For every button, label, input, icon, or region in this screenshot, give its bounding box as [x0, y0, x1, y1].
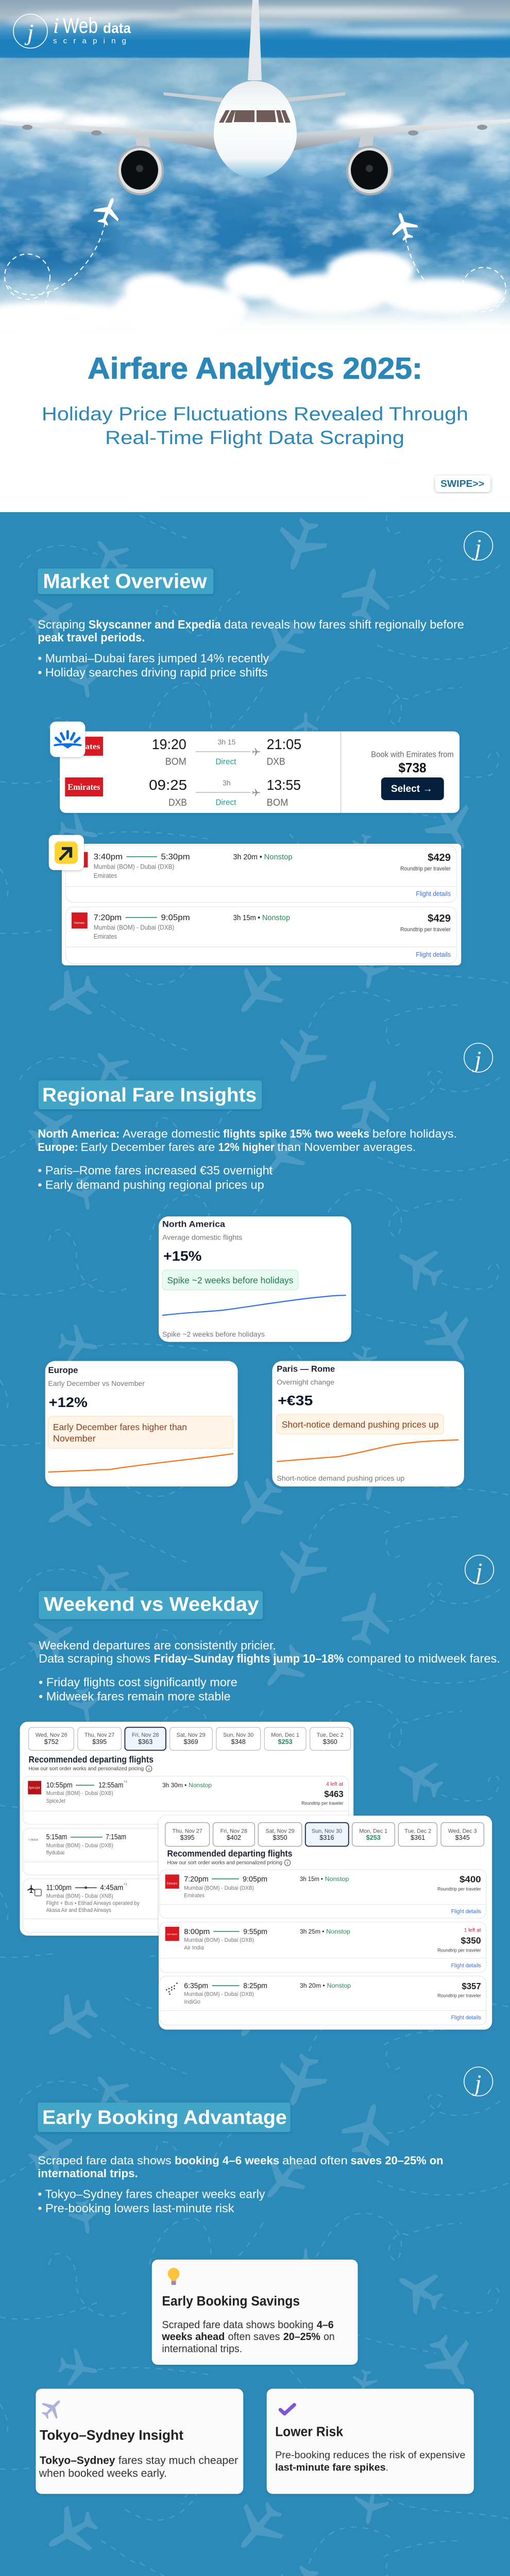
- panel: expedia flight card: Flight details: [416, 890, 451, 897]
- text block: • Holiday searches driving rapid price shifts: [38, 666, 268, 679]
- date tabs: $253: [366, 1834, 381, 1841]
- panel: skyscanner flight card: 3h: [223, 778, 231, 787]
- panel: expedia flight card: 9:05pm: [161, 913, 190, 922]
- flight row: spicejet: 12:55am: [98, 1781, 123, 1789]
- panel: lower risk card: last-minute fare spikes: [275, 2462, 386, 2473]
- panel: expedia flight card: Mumbai (BOM) - Dubai (DXB): [94, 924, 174, 931]
- flight row: indigo: Nonstop: [327, 1982, 351, 1989]
- flight row: air india: Air India: [184, 1945, 204, 1951]
- swipe button: SWIPE>>: [440, 479, 484, 489]
- logo: iWeb data scraping white: scraping: [53, 37, 126, 45]
- icon: small plane with dashed route left: [5, 193, 125, 326]
- flight row: flight plus bus: Flight + Bus • Etihad Airways operated by: [46, 1901, 140, 1907]
- flight row: indigo: [166, 1981, 481, 2021]
- panel: expedia flight card: [49, 835, 461, 965]
- panel: north america card: North America: [162, 1219, 226, 1229]
- icon: light bulb: [168, 2268, 179, 2285]
- flight row: emirates: 7:20pm: [184, 1875, 209, 1884]
- panel: paris rome card: [272, 1361, 464, 1486]
- panel: weekend vs weekday: [20, 1555, 500, 2029]
- date tabs: $395: [180, 1834, 195, 1841]
- icon: expedia: [49, 835, 84, 870]
- panel: skyscanner flight card: Select →: [391, 784, 433, 794]
- flight row: air india: $350: [461, 1935, 481, 1945]
- text block: Scraped fare data shows: [38, 2154, 172, 2167]
- flight row: indigo: Roundtrip per traveler: [437, 1993, 481, 1998]
- panel: skyscanner flight card: Emirates: [67, 782, 100, 792]
- logo: iWeb data scraping white: j: [25, 19, 33, 45]
- text block: Weekend departures are consistently pricier.: [39, 1638, 276, 1652]
- panel: expedia flight card: Emirates: [94, 933, 117, 940]
- flight row: emirates: Flight details: [451, 1909, 481, 1915]
- text block: compared to midweek fares.: [347, 1652, 500, 1665]
- heading: Regional Fare Insights: [42, 1084, 257, 1106]
- panel: expedia flight card: $429: [428, 852, 451, 863]
- logo: iWeb data scraping white: Web: [63, 13, 98, 38]
- date tabs: Wed, Dec 3: [448, 1828, 477, 1834]
- flight row: air india: 3h 25m •: [300, 1928, 324, 1935]
- flight row: air india: Flight details: [451, 1962, 481, 1969]
- panel: skyscanner flight card: 3h 15: [218, 738, 236, 746]
- date tabs: $402: [227, 1834, 241, 1841]
- date tabs: $350: [273, 1834, 287, 1841]
- flight row: flydubai: 5:15am: [46, 1833, 67, 1841]
- text block: Average domestic: [123, 1127, 220, 1140]
- flight row: indigo: 6:35pm: [184, 1982, 208, 1990]
- date tabs: $752: [44, 1738, 59, 1745]
- date tabs: $316: [319, 1834, 334, 1841]
- flight row: emirates: Nonstop: [325, 1875, 349, 1883]
- flight row: flight plus bus: 4:45am: [100, 1884, 123, 1892]
- airplane: [0, 0, 510, 195]
- text block: Friday–Sunday flights jump 10–18%: [154, 1652, 344, 1665]
- panel: market overview: [38, 531, 492, 965]
- date tabs: Tue, Dec 2: [317, 1732, 344, 1738]
- panel: skyscanner flight card: Direct: [216, 798, 236, 807]
- panel: europe card: +12%: [49, 1395, 88, 1410]
- panel: north america card: Average domestic flights: [162, 1233, 242, 1241]
- sky photo background: [0, 0, 510, 512]
- flight row: indigo: $357: [462, 1981, 481, 1991]
- panel: early booking savings card: [152, 2260, 358, 2365]
- text block: booking 4–6 weeks: [175, 2154, 279, 2167]
- date tabs: Fri, Nov 28: [132, 1732, 159, 1738]
- panel: expedia flight card: Mumbai (BOM) - Dubai (DXB): [94, 863, 174, 870]
- text block: • Mumbai–Dubai fares jumped 14% recently: [38, 652, 269, 665]
- panel: paris rome card: Short-notice demand pushing prices up: [277, 1474, 405, 1482]
- logo mark: [464, 1043, 492, 1072]
- flight row: emirates: 3h 15m •: [300, 1875, 323, 1883]
- panel: early booking savings card: Scraped fare data shows booking: [162, 2319, 314, 2331]
- flight row: spicejet: 4 left at: [326, 1782, 343, 1787]
- panel: expedia flight card: Flight details: [416, 951, 451, 958]
- panel: lower risk card: Lower Risk: [275, 2425, 344, 2439]
- panel: expedia flight card: Roundtrip per traveler: [400, 866, 451, 872]
- text block: data reveals how fares shift regionally before: [224, 618, 464, 631]
- flight row: indigo: 8:25pm: [243, 1982, 267, 1990]
- panel: paris rome card: +€35: [278, 1393, 313, 1409]
- text block: [39, 1638, 500, 1703]
- panel: hero: [0, 0, 510, 512]
- text block: North America:: [38, 1127, 120, 1140]
- flight row: air india: Roundtrip per traveler: [437, 1947, 481, 1953]
- date tabs: Sun, Nov 30: [223, 1732, 253, 1738]
- date tabs: [165, 1823, 484, 1846]
- flight row: flydubai: Mumbai (BOM) - Dubai (DXB): [46, 1842, 113, 1849]
- logo: iWeb data scraping white: i: [53, 14, 59, 38]
- panel: tokyo sydney card: Tokyo–Sydney Insight: [40, 2427, 183, 2443]
- flight row: emirates: Roundtrip per traveler: [437, 1887, 481, 1892]
- text block: international trips.: [38, 2167, 138, 2180]
- panel: friday flight listing: How our sort order works and personalized pricing: [29, 1766, 144, 1772]
- heading: [38, 2103, 291, 2132]
- flight row: emirates: $400: [460, 1874, 481, 1885]
- panel: expedia flight card: Emirates: [74, 922, 85, 925]
- panel: regional fare insights: [38, 1043, 492, 1486]
- panel: skyscanner flight card: 09:25: [149, 777, 187, 793]
- panel: expedia flight card: 5:30pm: [161, 853, 190, 861]
- panel: skyscanner flight card: Book with Emirates from: [371, 750, 454, 759]
- flight row: air india: 9:55pm: [243, 1928, 267, 1936]
- flight row: emirates: [165, 1874, 481, 1915]
- date tabs: $361: [411, 1834, 425, 1841]
- panel: north america card: Spike ~2 weeks before holidays: [167, 1275, 293, 1285]
- panel: friday flight listing: [20, 1722, 353, 1936]
- panel: early booking savings card: international trips.: [162, 2344, 242, 2355]
- date tabs: $369: [184, 1738, 198, 1745]
- panel: skyscanner flight card: 21:05: [267, 736, 301, 752]
- flight row: air india: [165, 1927, 481, 1969]
- text block: Europe:: [38, 1141, 78, 1154]
- date tabs: Thu, Nov 27: [172, 1828, 202, 1834]
- icon: small plane with dashed route right: [387, 209, 506, 312]
- logo mark: [464, 531, 492, 561]
- panel: lower risk card: Pre-booking reduces the risk of expensive: [275, 2450, 465, 2461]
- panel: north america card: Spike ~2 weeks before holidays: [162, 1330, 265, 1338]
- panel: early booking savings card: on: [324, 2331, 335, 2343]
- flight row: spicejet: 3h 30m •: [162, 1782, 186, 1789]
- panel: europe card: [45, 1361, 237, 1486]
- panel: north america card: +15%: [163, 1248, 201, 1264]
- panel: skyscanner flight card: BOM: [267, 798, 288, 808]
- flight row: indigo: Mumbai (BOM) - Dubai (DXB): [184, 1991, 254, 1997]
- logo mark: j: [472, 1046, 481, 1072]
- date tabs: Thu, Nov 27: [84, 1732, 114, 1738]
- panel: early booking savings card: often saves: [228, 2331, 280, 2343]
- flight row: flight plus bus: Akasa Air and Etihad Airways: [46, 1907, 111, 1913]
- panel: expedia flight card: 3:40pm: [94, 853, 123, 861]
- panel: europe card: Europe: [48, 1366, 78, 1375]
- flight row: indigo: IndiGo: [184, 1999, 200, 2005]
- panel: tokyo sydney card: Tokyo–Sydney: [40, 2454, 115, 2467]
- date tabs: Tue, Dec 2: [404, 1828, 431, 1834]
- flight row: air india: Nonstop: [326, 1928, 350, 1935]
- panel: north america card: [159, 1216, 351, 1342]
- panel: expedia flight card: Emirates: [94, 872, 117, 879]
- flight row: air india: 1 left at: [464, 1927, 481, 1933]
- panel: skyscanner flight card: $738: [398, 761, 427, 775]
- text block: • Early demand pushing regional prices up: [38, 1178, 264, 1191]
- flight row: spicejet: SpiceJet: [46, 1798, 65, 1804]
- panel: paris rome card: Paris — Rome: [277, 1365, 335, 1374]
- flight row: flight plus bus: Mumbai (BOM) - Dubai (XNB): [46, 1893, 113, 1900]
- text block: [38, 2154, 443, 2215]
- date tabs: $253: [278, 1738, 293, 1745]
- date tabs: $360: [323, 1738, 337, 1745]
- text block: • Midweek fares remain more stable: [39, 1689, 231, 1703]
- panel: expedia flight card: 3h 20m •: [233, 853, 262, 861]
- flight row: spicejet: $463: [324, 1789, 344, 1799]
- flight row: spicejet: [28, 1780, 344, 1806]
- flight row: air india: Mumbai (BOM) - Dubai (DXB): [184, 1937, 254, 1943]
- date tabs: $363: [138, 1738, 152, 1745]
- heading: [39, 1591, 263, 1619]
- flight row: air india: AIR INDIA: [167, 1933, 177, 1936]
- date tabs: Wed, Nov 26: [36, 1732, 67, 1738]
- panel: sunday flight listing: How our sort order works and personalized pricing: [167, 1860, 282, 1866]
- text block: than November averages.: [277, 1141, 416, 1154]
- flight row: emirates: Emirates: [167, 1883, 178, 1886]
- text block: Scraping: [38, 618, 85, 631]
- logo mark: j: [472, 2070, 481, 2096]
- icon: skyscanner: [50, 722, 85, 757]
- date tabs: Mon, Dec 1: [359, 1828, 387, 1834]
- panel: tokyo sydney card: when booked weeks early.: [39, 2467, 167, 2479]
- panel: paris rome card: Overnight change: [277, 1378, 334, 1386]
- text block: [38, 618, 464, 679]
- flight row: spicejet: 10:55pm: [46, 1781, 73, 1789]
- flight row: flydubai: [28, 1833, 126, 1856]
- panel: tokyo sydney card: fares stay much cheaper: [118, 2454, 238, 2467]
- text block: • Friday flights cost significantly more: [39, 1675, 237, 1689]
- panel: friday flight listing: Recommended departing flights: [29, 1754, 154, 1765]
- panel: skyscanner flight card: 19:20: [152, 736, 186, 752]
- logo mark: [464, 2067, 492, 2096]
- panel: skyscanner flight card: BOM: [165, 757, 186, 768]
- panel: early booking advantage: [36, 2067, 492, 2494]
- date tabs: Sun, Nov 30: [312, 1828, 342, 1834]
- flight row: flydubai: flydubai: [46, 1850, 64, 1856]
- date tabs: Mon, Dec 1: [271, 1732, 299, 1738]
- text block: Skyscanner and Expedia: [89, 618, 221, 631]
- panel: tokyo sydney card: [36, 2389, 243, 2494]
- flight row: flydubai: 7:15am: [106, 1833, 126, 1841]
- swipe button: [435, 476, 490, 492]
- panel: early booking savings card: weeks ahead: [161, 2331, 225, 2343]
- panel: skyscanner flight card: 13:55: [267, 777, 301, 793]
- date tabs: $345: [455, 1834, 470, 1841]
- text block: 12% higher: [218, 1141, 275, 1154]
- heading: Early Booking Advantage: [42, 2107, 287, 2129]
- flight row: indigo: Flight details: [451, 2015, 481, 2021]
- text block: Early December fares are: [81, 1141, 215, 1154]
- text block: flights spike 15% two weeks: [223, 1127, 369, 1140]
- heading: Weekend vs Weekday: [44, 1594, 259, 1615]
- panel: sunday flight listing: Recommended departing flights: [167, 1848, 293, 1858]
- text block: ahead often: [282, 2154, 348, 2167]
- logo mark: j: [473, 1558, 482, 1584]
- title: Airfare Analytics 2025:: [88, 352, 422, 385]
- panel: expedia flight card: $429: [428, 913, 451, 924]
- flight row: air india: 8:00pm: [184, 1928, 210, 1936]
- panel: skyscanner flight card: DXB: [168, 798, 187, 808]
- panel: early booking savings card: Early Booking Savings: [162, 2294, 300, 2309]
- flight row: flight plus bus: 11:00pm: [46, 1884, 72, 1892]
- date tabs: [29, 1727, 351, 1750]
- text block: • Pre-booking lowers last-minute risk: [38, 2201, 234, 2215]
- panel: expedia flight card: Roundtrip per traveler: [400, 926, 451, 933]
- panel: paris rome card: Short-notice demand pushing prices up: [282, 1419, 439, 1430]
- date tabs: $348: [231, 1738, 246, 1745]
- panel: lower risk card: .: [386, 2462, 388, 2473]
- text block: peak travel periods.: [38, 631, 145, 644]
- panel: expedia flight card: Nonstop: [264, 853, 293, 861]
- icon: check mark: [280, 2405, 294, 2414]
- flight row: emirates: Emirates: [184, 1892, 205, 1899]
- panel: lower risk card: [267, 2389, 474, 2494]
- text block: Data scraping shows: [39, 1652, 150, 1665]
- icon: plane: [37, 2393, 67, 2424]
- flight row: flight plus bus: +1: [124, 1883, 128, 1886]
- logo mark: [465, 1555, 494, 1584]
- flight row: spicejet: +1: [124, 1780, 128, 1784]
- heading: Market Overview: [43, 570, 207, 593]
- flight row: flight plus bus: [27, 1883, 140, 1913]
- panel: skyscanner flight card: [50, 722, 460, 813]
- panel: skyscanner flight card: Direct: [216, 757, 236, 766]
- date tabs: Sat, Nov 29: [177, 1732, 206, 1738]
- panel: expedia flight card: 7:20pm: [94, 913, 122, 922]
- text block: • Tokyo–Sydney fares cheaper weeks early: [38, 2187, 265, 2201]
- panel: expedia flight card: Nonstop: [262, 914, 290, 922]
- text block: saves 20–25% on: [351, 2154, 443, 2167]
- logo: iWeb data scraping white: [13, 13, 131, 48]
- logo: iWeb data scraping white: data: [103, 20, 131, 36]
- panel: expedia flight card: 3h 15m •: [233, 914, 260, 922]
- flight row: spicejet: Mumbai (BOM) - Dubai (DXB): [46, 1790, 113, 1797]
- panel: europe card: November: [53, 1433, 96, 1444]
- subtitle: Holiday Price Fluctuations Revealed Through: [42, 403, 468, 425]
- flight row: flydubai: flydubai: [28, 1839, 38, 1842]
- text block: • Paris–Rome fares increased €35 overnight: [38, 1163, 273, 1177]
- panel: europe card: Early December fares higher than: [53, 1422, 187, 1432]
- panel: early booking savings card: 4–6: [317, 2319, 334, 2331]
- date tabs: Fri, Nov 28: [220, 1828, 247, 1834]
- subtitle: [42, 403, 468, 448]
- subtitle: Real-Time Flight Data Scraping: [105, 427, 404, 448]
- panel: early booking savings card: 20–25%: [283, 2331, 320, 2343]
- flight row: spicejet: Roundtrip per traveler: [301, 1801, 344, 1806]
- panel: skyscanner flight card: DXB: [267, 757, 285, 768]
- panel: sunday flight listing: [159, 1816, 492, 2029]
- flight row: spicejet: Nonstop: [189, 1782, 212, 1789]
- flight row: indigo: 3h 20m •: [300, 1982, 325, 1989]
- panel: europe card: Early December vs November: [48, 1379, 145, 1387]
- date tabs: $395: [92, 1738, 107, 1745]
- flight row: emirates: Mumbai (BOM) - Dubai (DXB): [184, 1885, 254, 1891]
- text block: [38, 1127, 457, 1191]
- logo mark: j: [472, 534, 481, 561]
- date tabs: Sat, Nov 29: [266, 1828, 295, 1834]
- flight row: emirates: 9:05pm: [243, 1875, 267, 1884]
- panel: skyscanner flight card: ates: [85, 742, 100, 751]
- text block: before holidays.: [372, 1127, 457, 1140]
- flight row: spicejet: Spicejet: [29, 1786, 41, 1790]
